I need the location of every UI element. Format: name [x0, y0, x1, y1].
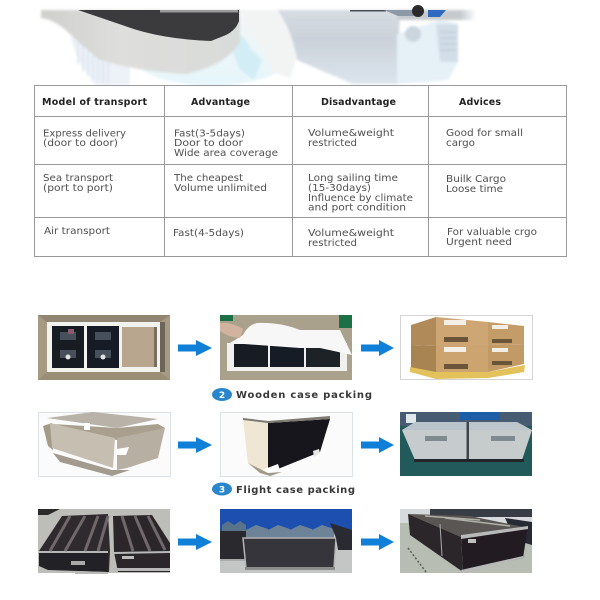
number badge 2 [212, 388, 232, 401]
ship hull [78, 10, 239, 41]
row: sea transport: Influence by climate [308, 193, 413, 204]
row: express delivery: restricted [308, 138, 357, 149]
table header row: Disadvantage [321, 97, 396, 108]
row: express delivery [43, 128, 523, 159]
truck top [350, 10, 386, 12]
arrow [361, 340, 394, 356]
row: express delivery: Door to door [174, 138, 244, 149]
row: sea transport: The cheapest [173, 173, 243, 184]
row: air transport: Fast(4-5days) [173, 228, 244, 239]
photo: LED panels in carton [38, 315, 170, 380]
photo: crates in warehouse [400, 412, 532, 476]
section label: wooden case packing: Wooden case packing [236, 390, 372, 401]
arrow [178, 437, 212, 453]
arrow [178, 340, 212, 356]
row: sea transport [43, 173, 506, 214]
arrow [361, 534, 394, 550]
photo: closed flight cases against blue wall [220, 509, 352, 573]
number badge 3 [212, 482, 232, 496]
row: express delivery: Fast(3-5days) [174, 128, 245, 140]
photo: row of flight cases [400, 509, 532, 573]
section label: flight case packing [212, 482, 355, 496]
transport comparison table [34, 86, 566, 256]
row: sea transport: and port condition [308, 202, 406, 214]
row: express delivery: cargo [446, 138, 475, 149]
photo: foam sheet lifted off panels [220, 315, 352, 380]
row: air transport: For valuable crgo [447, 227, 537, 238]
section label: flight case packing: Flight case packing [236, 485, 355, 496]
row: express delivery: Wide area coverage [174, 148, 278, 159]
row: air transport: Air transport [44, 226, 110, 237]
photo: open flight case with dividers [38, 509, 170, 574]
banner: faded ship, globe and truck image [41, 5, 476, 86]
row: sea transport: Long sailing time [308, 173, 398, 184]
row: express delivery: Express delivery [43, 128, 126, 140]
table header row: Advices [459, 97, 501, 108]
table header row: Advantage [191, 97, 250, 108]
photo: cartons on pallet [400, 316, 532, 380]
row: express delivery: Volume&weight [308, 128, 394, 139]
arrow [361, 437, 394, 453]
row: air transport: Urgent need [446, 237, 512, 248]
arrow [178, 534, 212, 550]
row: air transport: Volume&weight [308, 228, 394, 239]
row: sea transport: Sea transport [43, 173, 113, 184]
row: sea transport: (port to port) [43, 183, 113, 194]
number badge 3: 3 [219, 486, 225, 496]
row: air transport: restricted [308, 238, 357, 249]
table header row: Model of transport [42, 97, 147, 108]
photo: closed crate with panels [220, 412, 352, 476]
row: express delivery: (door to door) [43, 138, 118, 149]
row: air transport [44, 226, 537, 249]
table header row [42, 97, 501, 108]
row: sea transport: Builk Cargo [446, 174, 506, 185]
number badge 2: 2 [219, 391, 225, 401]
row: sea transport: Loose time [446, 184, 503, 195]
row: sea transport: Volume unlimited [174, 183, 267, 194]
row: express delivery: Good for small [446, 128, 523, 139]
row: sea transport: (15-30days) [308, 183, 371, 194]
photo: open wooden crate [38, 412, 170, 476]
